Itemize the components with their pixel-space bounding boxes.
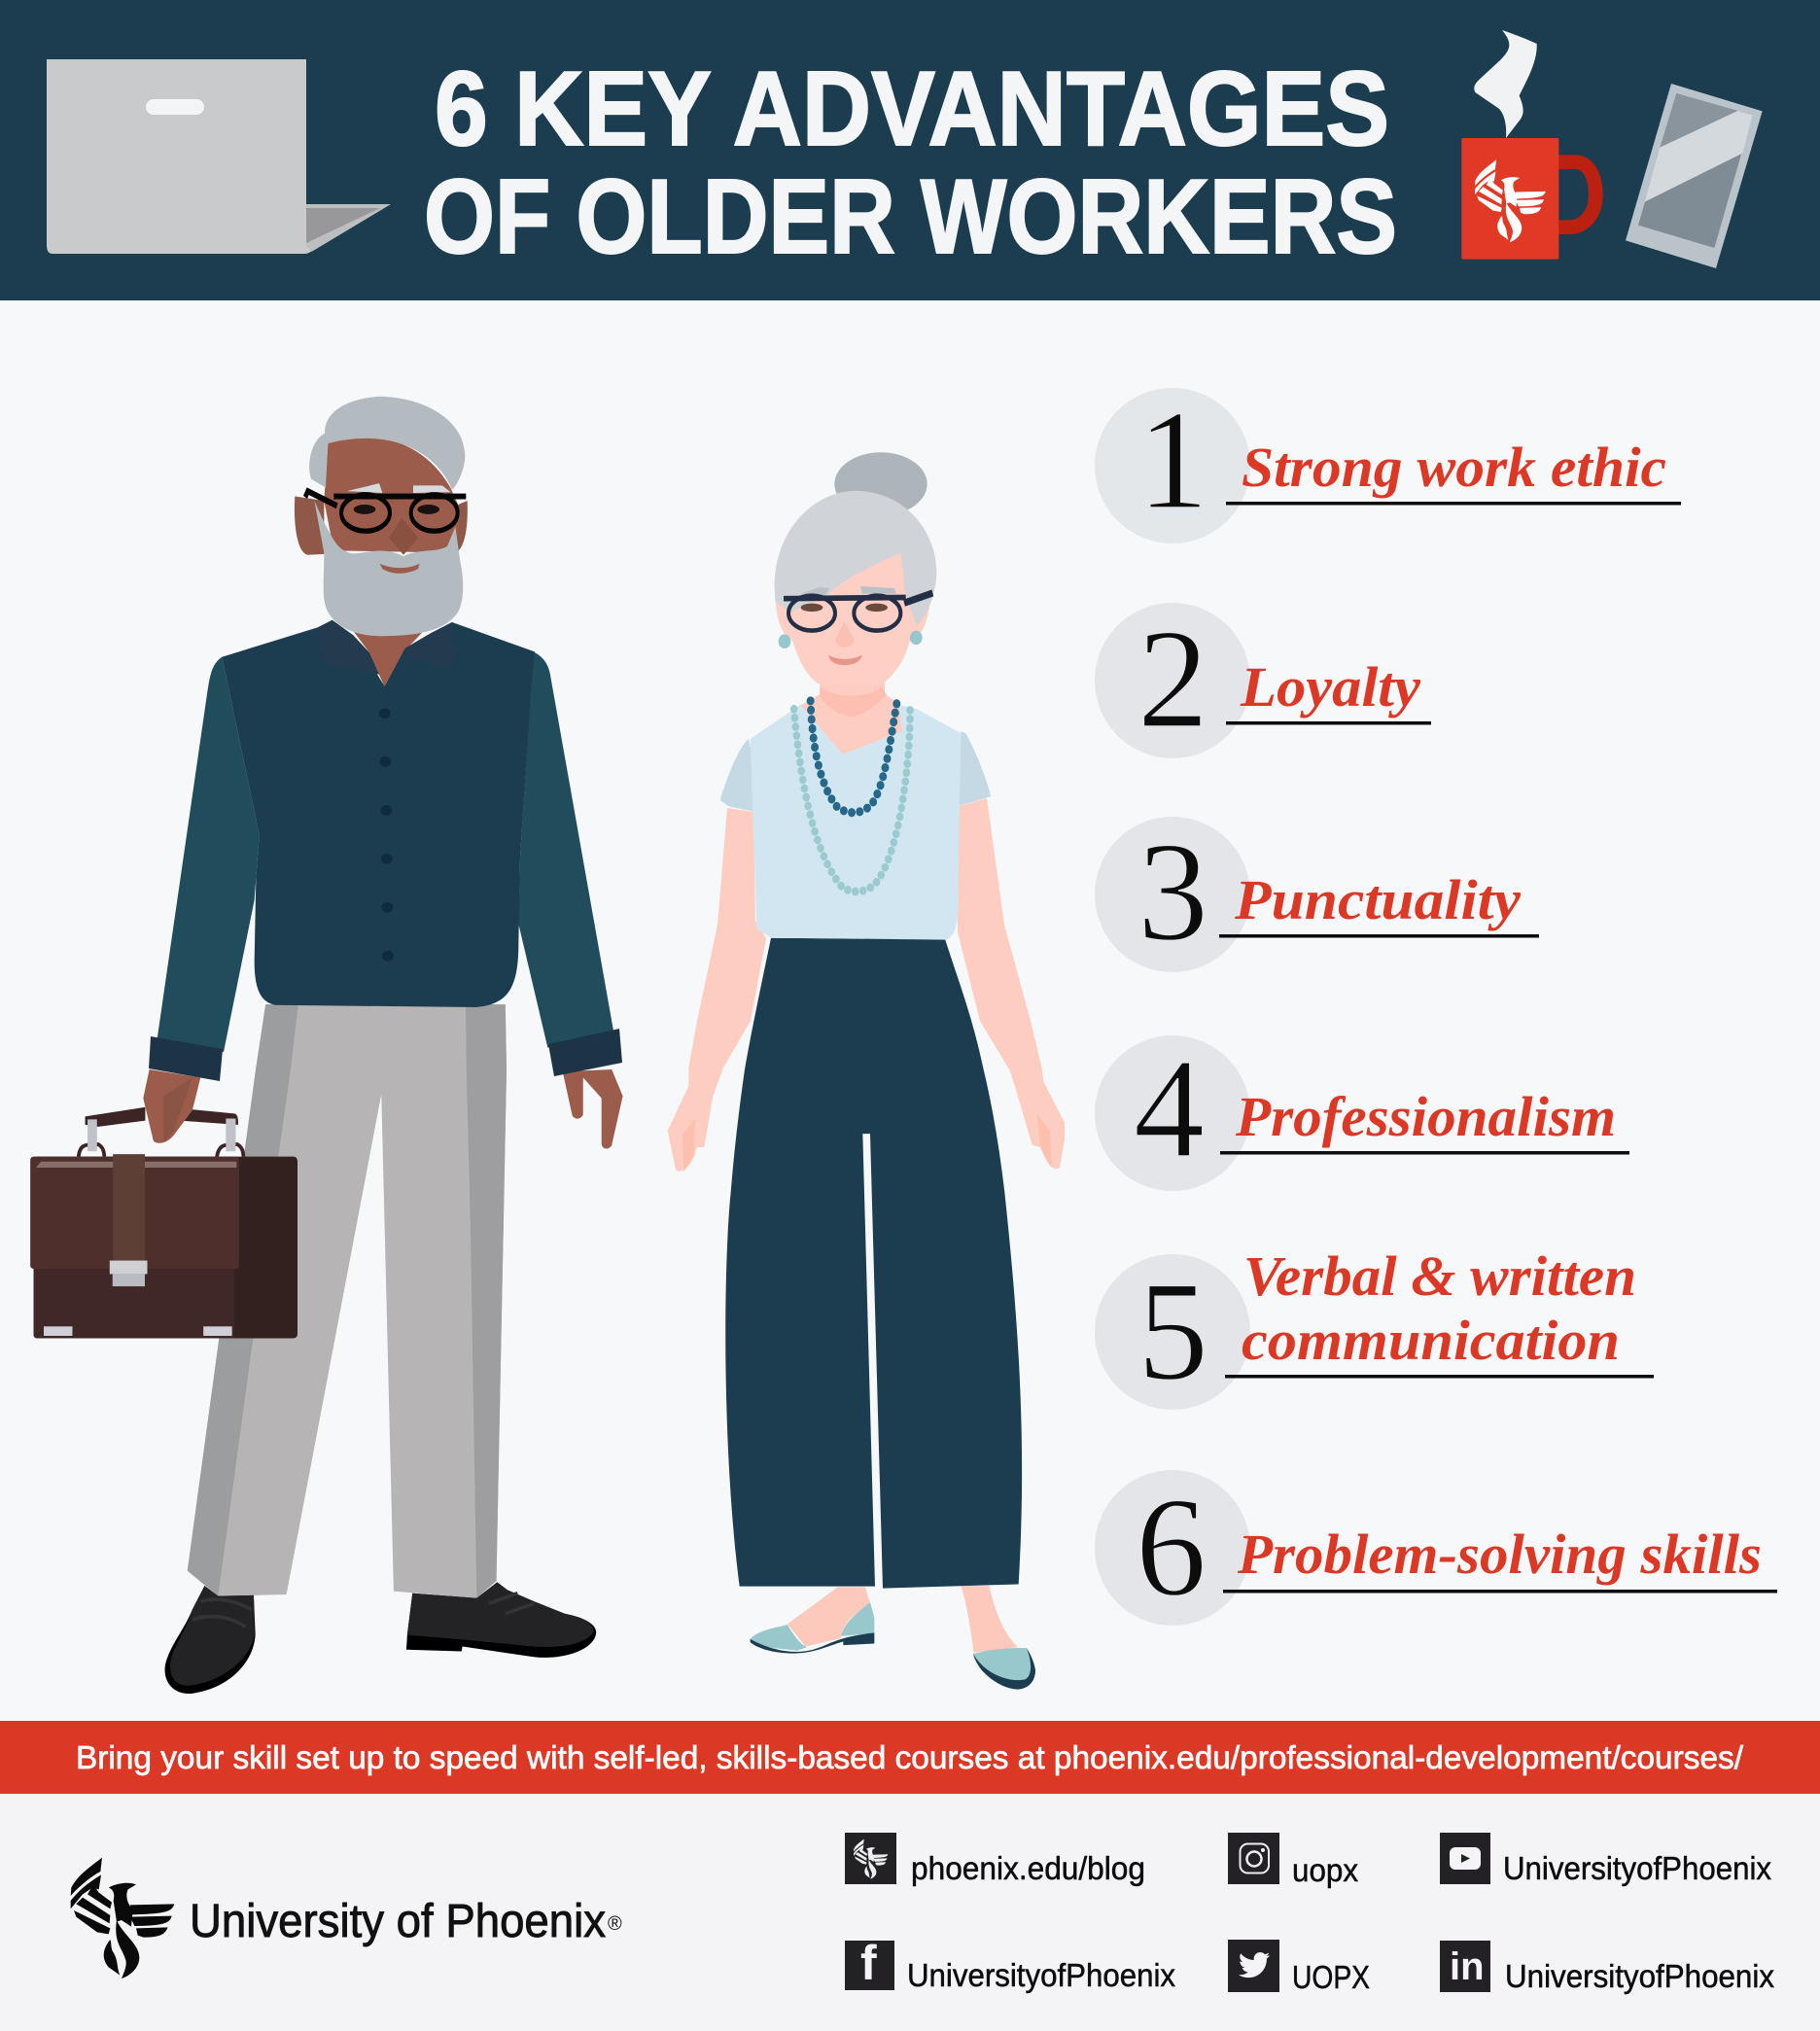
ears: [295, 497, 324, 555]
University of Phoenix logo: University of Phoenix: [190, 1896, 606, 1947]
advantages list: [1095, 381, 1777, 1626]
call-to-action bar: Bring your skill set up to speed with self-led, skills-based courses at phoenix.edu/professional-development/courses/: [76, 1739, 1744, 1775]
trousers: [188, 1004, 507, 1598]
mouth: [380, 564, 420, 574]
shoes: [165, 1582, 596, 1694]
item 5: communication: [1242, 1309, 1620, 1372]
beard: [314, 501, 463, 636]
figure: older woman: [668, 452, 1065, 1690]
item 2: 2: [1138, 600, 1208, 757]
icon: coffee mug with steam: [1461, 30, 1595, 260]
blouse sleeves: [720, 739, 753, 812]
hair: [775, 491, 936, 625]
social: youtube: [1440, 1833, 1771, 1886]
item 4: 4: [1134, 1030, 1205, 1187]
face: [324, 437, 460, 553]
shirt buttons: [379, 708, 394, 962]
shirt body: [222, 620, 535, 1007]
earrings: [779, 634, 790, 648]
social: youtube: UniversityofPhoenix: [1503, 1850, 1771, 1886]
item 5: Verbal & written: [1243, 1244, 1636, 1308]
hands: [668, 1069, 1065, 1172]
social: blog: phoenix.edu/blog: [911, 1850, 1145, 1886]
icon: tablet: [1626, 84, 1763, 268]
item 6: [1095, 1468, 1777, 1626]
item 3: [1095, 813, 1539, 972]
item 2: [1095, 600, 1431, 758]
shirt cuffs: [149, 1029, 622, 1081]
social: facebook: f: [860, 1936, 877, 1990]
item 1: 1: [1138, 381, 1208, 539]
feet and flats: [751, 1586, 1035, 1690]
social: instagram: uopx: [1292, 1852, 1358, 1888]
glasses: [305, 491, 466, 531]
necklace: long light beads: [794, 709, 910, 892]
social: instagram: [1228, 1833, 1358, 1888]
title: 6 KEY ADVANTAGES: [435, 50, 1389, 168]
social: facebook: UniversityofPhoenix: [907, 1957, 1175, 1993]
chin shadow: [820, 686, 887, 717]
hair: [309, 397, 465, 490]
University of Phoenix logo: ®: [608, 1913, 622, 1935]
item 1: Strong work ethic: [1242, 436, 1666, 499]
hands: [143, 1069, 623, 1148]
social: twitter: UOPX: [1292, 1959, 1370, 1995]
face: [775, 549, 930, 684]
social: blog: [845, 1833, 1145, 1886]
social: twitter: [1228, 1940, 1370, 1995]
glasses: [784, 593, 932, 631]
eyes: [801, 604, 822, 612]
shirt and head: [158, 397, 614, 1052]
neck: [350, 626, 428, 687]
shirt sleeves: [158, 657, 260, 1052]
item 1: [1095, 381, 1681, 543]
arms: [688, 798, 1042, 1069]
footer: [0, 1794, 1820, 2031]
item 6: 6: [1136, 1468, 1207, 1626]
item 5: [1095, 1244, 1654, 1410]
eyebrows: [800, 586, 896, 596]
call-to-action bar: [0, 1721, 1820, 1794]
item 4: [1095, 1030, 1629, 1191]
title: OF OLDER WORKERS: [424, 158, 1397, 276]
social: linkedin: UniversityofPhoenix: [1505, 1958, 1774, 1994]
title: [424, 50, 1397, 276]
item 3: 3: [1138, 813, 1208, 970]
eyes: [354, 505, 375, 514]
wide-leg trousers: [725, 938, 1022, 1589]
item 5: 5: [1138, 1252, 1208, 1410]
blouse: [751, 705, 961, 940]
item 4: Professionalism: [1235, 1085, 1616, 1148]
eyebrows: [347, 483, 450, 493]
header banner: [0, 0, 1820, 300]
social: linkedin: [1440, 1941, 1774, 1994]
collar: [316, 620, 379, 675]
social: linkedin: in: [1450, 1945, 1485, 1988]
icon: laptop: [47, 59, 391, 254]
bun: [834, 452, 928, 515]
social: facebook: [845, 1936, 1175, 1993]
necklace: short dark beads: [811, 701, 896, 813]
item 2: Loyalty: [1240, 655, 1420, 718]
nose: [389, 518, 418, 555]
briefcase: [30, 1107, 298, 1339]
figure: older man with briefcase: [30, 397, 623, 1694]
University of Phoenix logo: [71, 1858, 622, 1978]
nose: [835, 621, 855, 648]
item 3: Punctuality: [1234, 868, 1521, 931]
neck: [800, 680, 902, 754]
item 6: Problem-solving skills: [1237, 1523, 1762, 1586]
upper body and head: [720, 452, 991, 940]
mouth: [828, 655, 862, 665]
